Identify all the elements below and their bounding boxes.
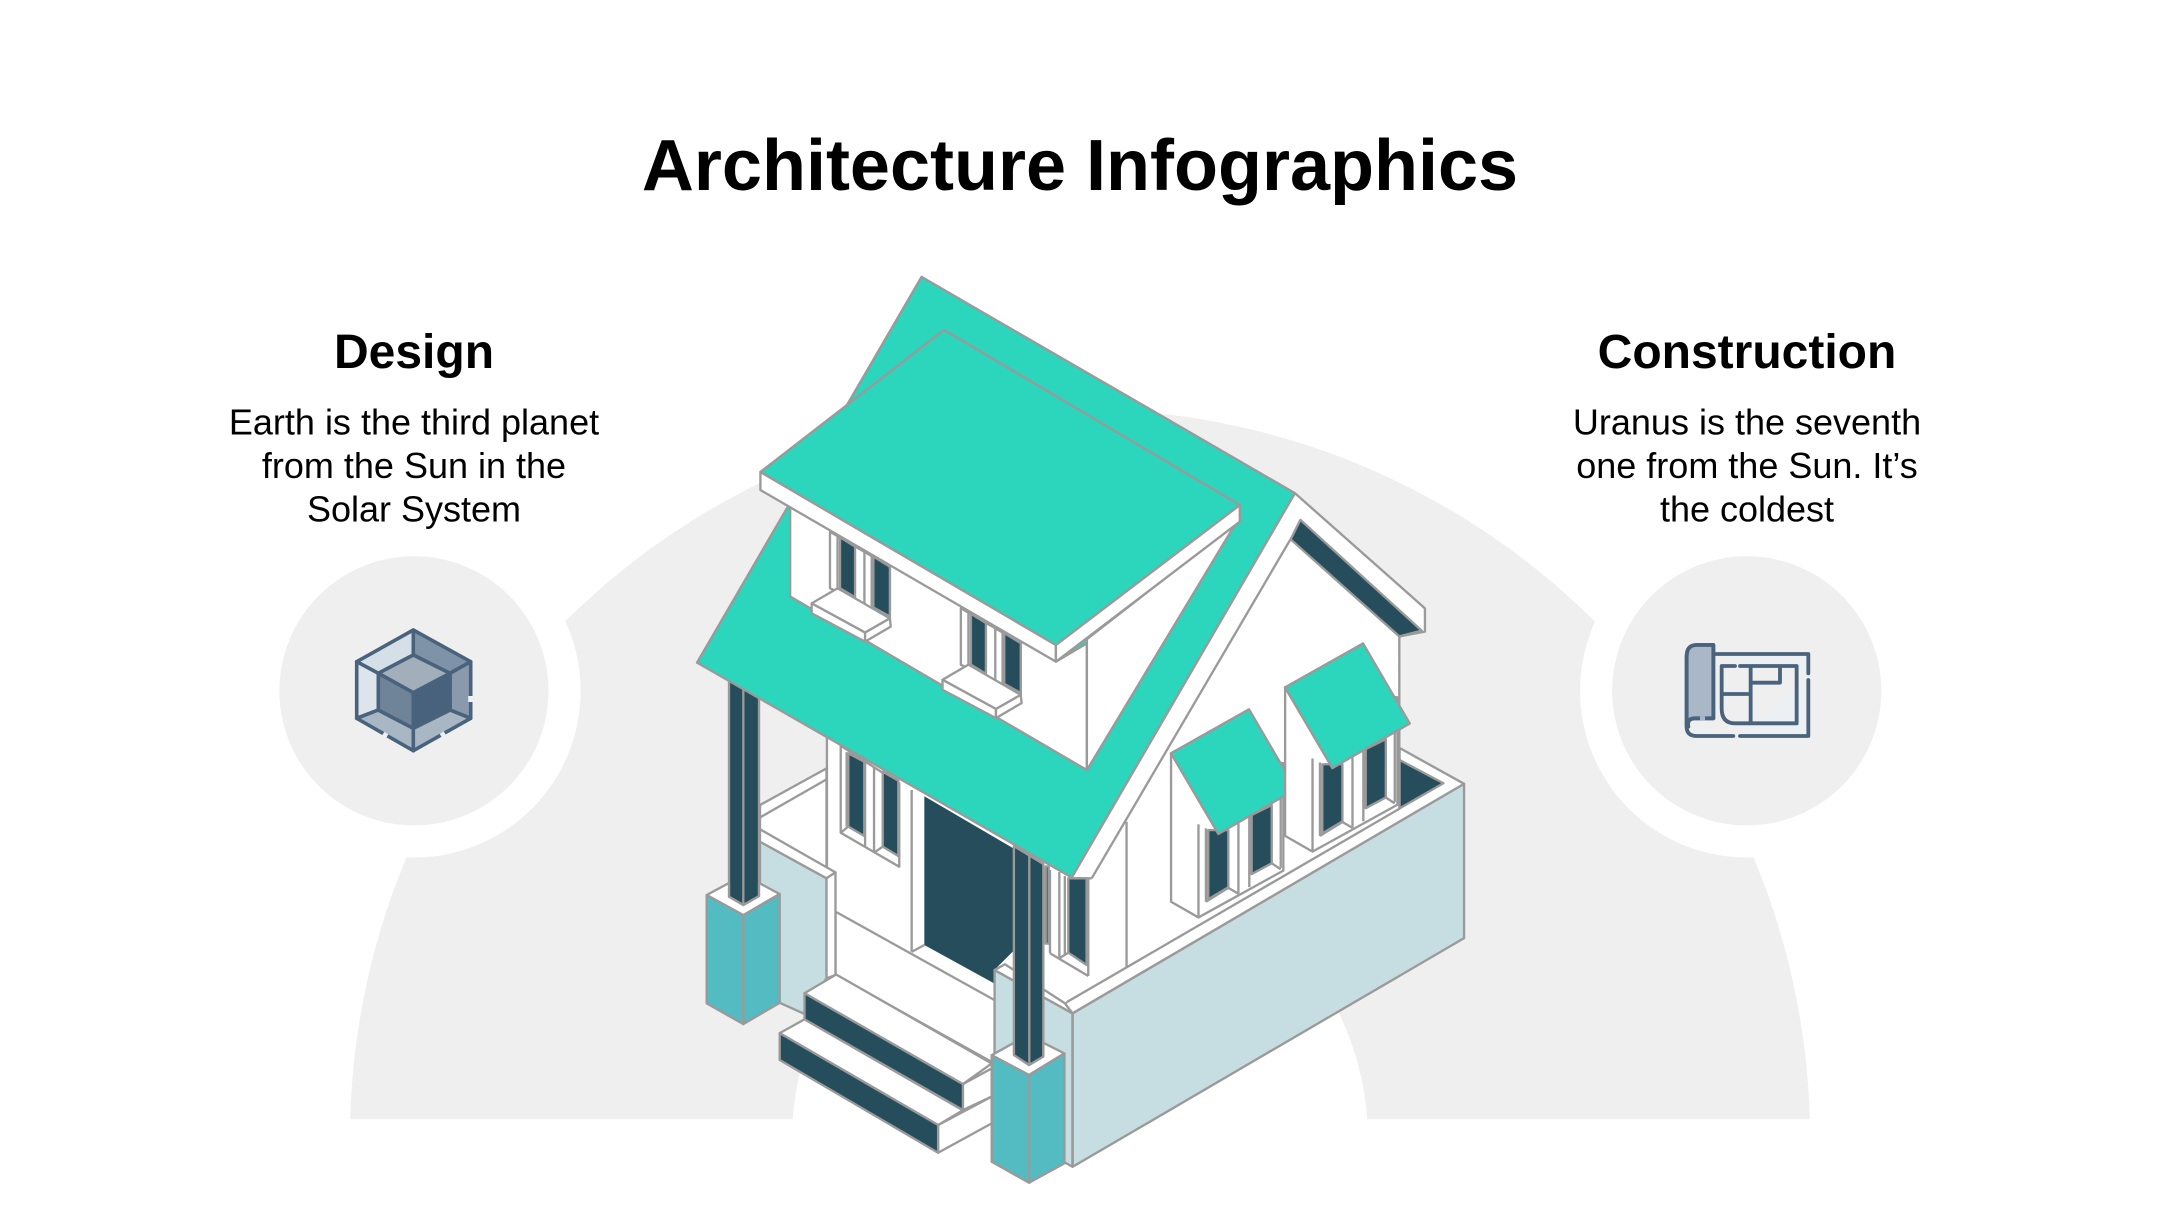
left icon circle	[247, 524, 581, 858]
door	[912, 790, 1014, 984]
upper window one	[812, 532, 891, 642]
background arch	[350, 409, 1810, 1119]
illustration: isometric house	[697, 277, 1464, 1183]
dormer wall	[790, 507, 1236, 770]
text block: construction	[1573, 402, 1921, 530]
text block: design: Solar System	[307, 488, 521, 530]
right lower window	[1043, 866, 1088, 976]
icon: cube	[357, 630, 471, 751]
text block: design	[229, 402, 599, 530]
text block: design: Earth is the third planet	[229, 402, 599, 442]
text block: design: from the Sun in the	[262, 445, 566, 486]
upper roof	[760, 330, 1240, 662]
title: Architecture Infographics	[642, 126, 1518, 206]
left pillar	[707, 675, 780, 1024]
right pillar	[992, 846, 1064, 1183]
right dormer one	[1171, 709, 1296, 917]
text block: construction: Uranus is the seventh	[1573, 402, 1921, 442]
right low wall	[995, 964, 1072, 1167]
front window	[841, 746, 899, 867]
text block: construction: the coldest	[1660, 488, 1834, 530]
right icon circle	[1580, 524, 1913, 858]
heading: construction: Construction	[1598, 326, 1896, 379]
left low wall	[760, 829, 835, 1013]
right dormer two	[1285, 643, 1410, 852]
main roof	[697, 277, 1295, 877]
heading: design: Design	[334, 326, 494, 379]
left porch railing	[760, 768, 827, 868]
steps	[780, 974, 992, 1153]
gable base	[1072, 877, 1092, 879]
upper window two	[943, 608, 1022, 718]
light blue front wall	[1073, 784, 1464, 1167]
balcony railing right	[1065, 748, 1464, 1013]
porch floor	[835, 912, 995, 1063]
text block: construction: one from the Sun. It’s	[1576, 445, 1918, 486]
icon: blueprint	[1687, 645, 1808, 736]
front wall	[827, 716, 1091, 1003]
right wall and gable	[1065, 493, 1425, 1003]
